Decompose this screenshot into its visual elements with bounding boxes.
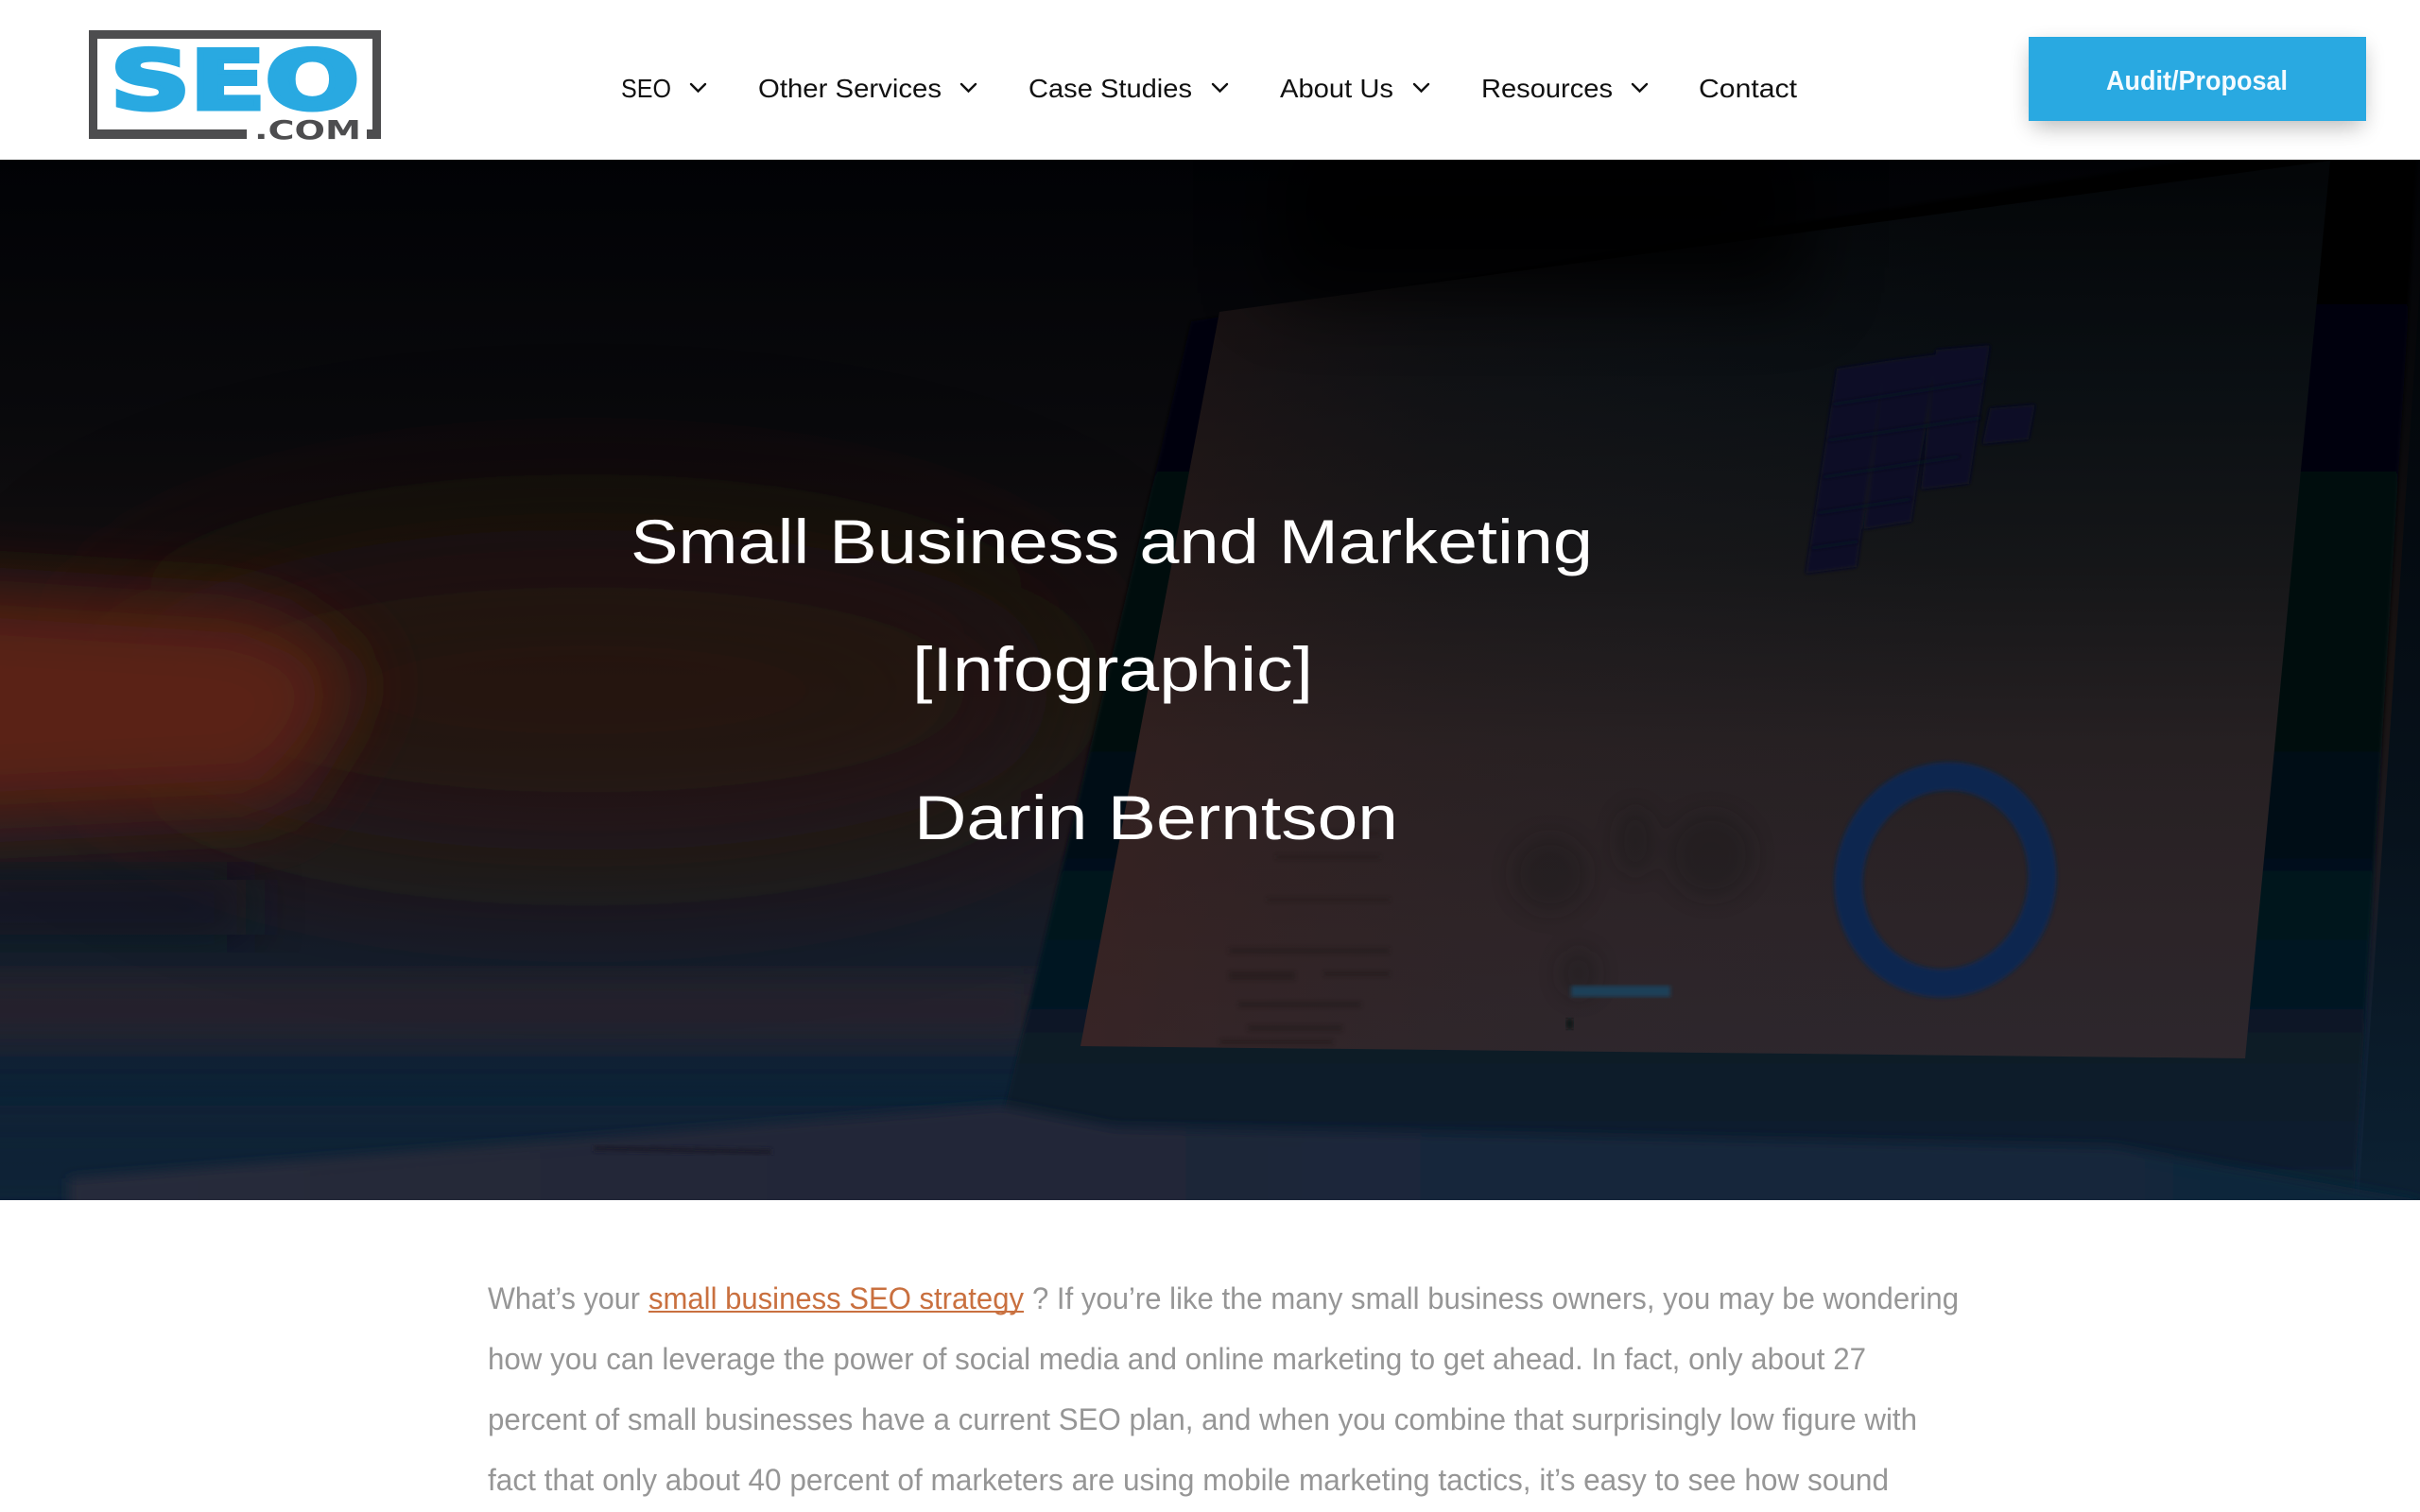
navigation menu: SEO xyxy=(621,74,671,103)
article paragraph: small business SEO strategy xyxy=(648,1281,1024,1315)
red glow at left xyxy=(0,529,1078,1228)
laptop bezel xyxy=(1008,272,2408,1178)
navigation menu: About Us xyxy=(1280,74,1393,103)
article paragraph xyxy=(488,1281,1959,1497)
heat grid on screen xyxy=(1806,345,2035,574)
article paragraph: percent of small businesses have a current SEO plan, and when you combine that surprisingly low figure with xyxy=(488,1402,1917,1436)
smudged table on screen xyxy=(1223,950,1385,1043)
laptop right edge xyxy=(2363,463,2420,1143)
audit proposal button xyxy=(2029,37,2366,127)
article paragraph: fact that only about 40 percent of marketers are using mobile marketing tactics, it’s easy to see how sound xyxy=(488,1463,1889,1497)
navigation menu: Other Services xyxy=(758,74,942,103)
navigation menu: Resources xyxy=(1481,74,1613,103)
donut chart on screen xyxy=(1826,756,2065,1004)
header bar xyxy=(0,0,2420,160)
hero title: Small Business and Marketing xyxy=(631,507,1593,576)
hero background photo of a laptop xyxy=(0,123,2420,1228)
laptop screen xyxy=(1040,151,2363,1068)
teal bar on screen xyxy=(1571,986,1670,997)
article paragraph: What’s your xyxy=(488,1281,640,1315)
logo xyxy=(89,30,381,146)
navigation menu: Contact xyxy=(1699,74,1797,103)
article paragraph: how you can leverage the power of social media and online marketing to get ahead. In fact, only about 27 xyxy=(488,1342,1866,1376)
navigation menu xyxy=(621,74,1797,103)
audit proposal button: Audit/Proposal xyxy=(2106,66,2288,96)
dark line on table xyxy=(594,1145,771,1155)
author name: Darin Berntson xyxy=(914,782,1398,852)
logo: SEO xyxy=(111,34,359,129)
logo: .COM xyxy=(254,114,361,146)
table surface xyxy=(66,1104,2380,1200)
article paragraph: ? If you’re like the many small business owners, you may be wondering xyxy=(1032,1281,1959,1315)
smudged map on screen xyxy=(1512,808,1754,997)
hero title: [Infographic] xyxy=(912,634,1313,704)
darkening at the top of hero xyxy=(1380,235,1785,291)
dark dot on screen xyxy=(1566,1019,1573,1029)
hero title xyxy=(631,507,1593,704)
navigation menu: Case Studies xyxy=(1028,74,1192,103)
